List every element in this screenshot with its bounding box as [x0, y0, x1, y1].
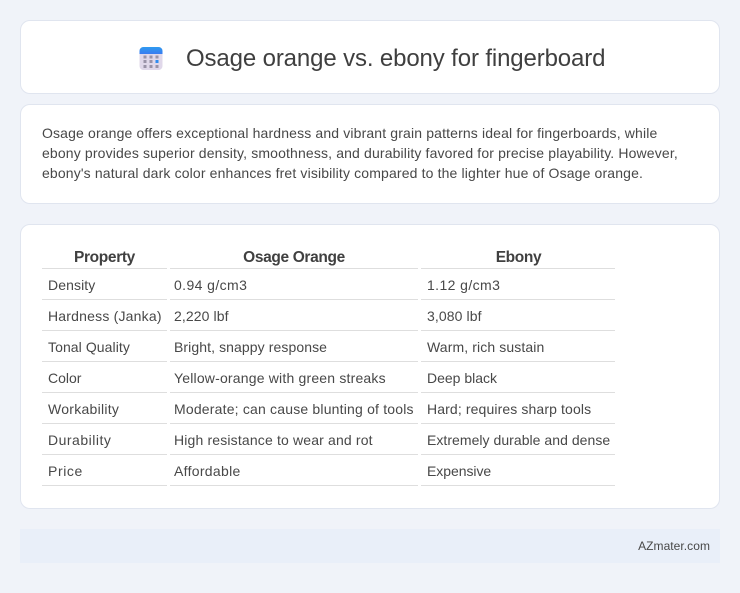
intro paragraph: Osage orange offers exceptional hardness and vibrant grain patterns ideal for fingerboards, while: [42, 125, 657, 141]
header row: [42, 249, 615, 269]
row: price: Affordable: [174, 463, 241, 479]
icon: calendar: [140, 47, 162, 70]
row: hardness: 3,080 lbf: [427, 308, 482, 324]
row: durability: High resistance to wear and rot: [174, 432, 373, 448]
intro paragraph: ebony provides superior density, smoothness, and durability favored for precise playability. However,: [42, 145, 678, 161]
row: durability: Extremely durable and dense: [427, 432, 610, 448]
row: color: Yellow-orange with green streaks: [174, 370, 386, 386]
panel: header: [20, 20, 720, 94]
footer bar: [20, 529, 720, 563]
header row: Ebony: [496, 249, 541, 266]
row: hardness: 2,220 lbf: [174, 308, 229, 324]
intro paragraph: ebony's natural dark color enhances fret visibility compared to the lighter hue of Osage orange.: [42, 165, 643, 181]
row: price: Price: [48, 463, 83, 479]
header row: Property: [74, 249, 135, 266]
row: tonal quality: Tonal Quality: [48, 339, 130, 355]
title: Osage orange vs. ebony for fingerboard: [186, 45, 605, 72]
row: tonal quality: Warm, rich sustain: [427, 339, 544, 355]
row: workability: Workability: [48, 401, 119, 417]
comparison table: [42, 249, 615, 486]
row: density: [42, 277, 615, 300]
row: color: Deep black: [427, 370, 497, 386]
panel: intro text: [20, 104, 720, 204]
row: durability: Durability: [48, 432, 111, 448]
row: price: Expensive: [427, 463, 491, 479]
intro paragraph: [42, 125, 678, 181]
row: density: Density: [48, 277, 95, 293]
row: hardness: [42, 308, 615, 331]
row: workability: Moderate; can cause blunting of tools: [174, 401, 414, 417]
row: color: Color: [48, 370, 81, 386]
row: tonal quality: Bright, snappy response: [174, 339, 327, 355]
row: density: 1.12 g/cm3: [427, 277, 500, 293]
row: hardness: Hardness (Janka): [48, 308, 162, 324]
row: tonal quality: [42, 339, 615, 362]
row: durability: [42, 432, 615, 455]
row: density: 0.94 g/cm3: [174, 277, 247, 293]
panel: comparison table: [20, 224, 720, 509]
row: workability: Hard; requires sharp tools: [427, 401, 591, 417]
footer credit: AZmater.com: [638, 539, 710, 553]
row: color: [42, 370, 615, 393]
row: price: [42, 463, 615, 486]
row: workability: [42, 401, 615, 424]
header row: Osage Orange: [243, 249, 345, 266]
